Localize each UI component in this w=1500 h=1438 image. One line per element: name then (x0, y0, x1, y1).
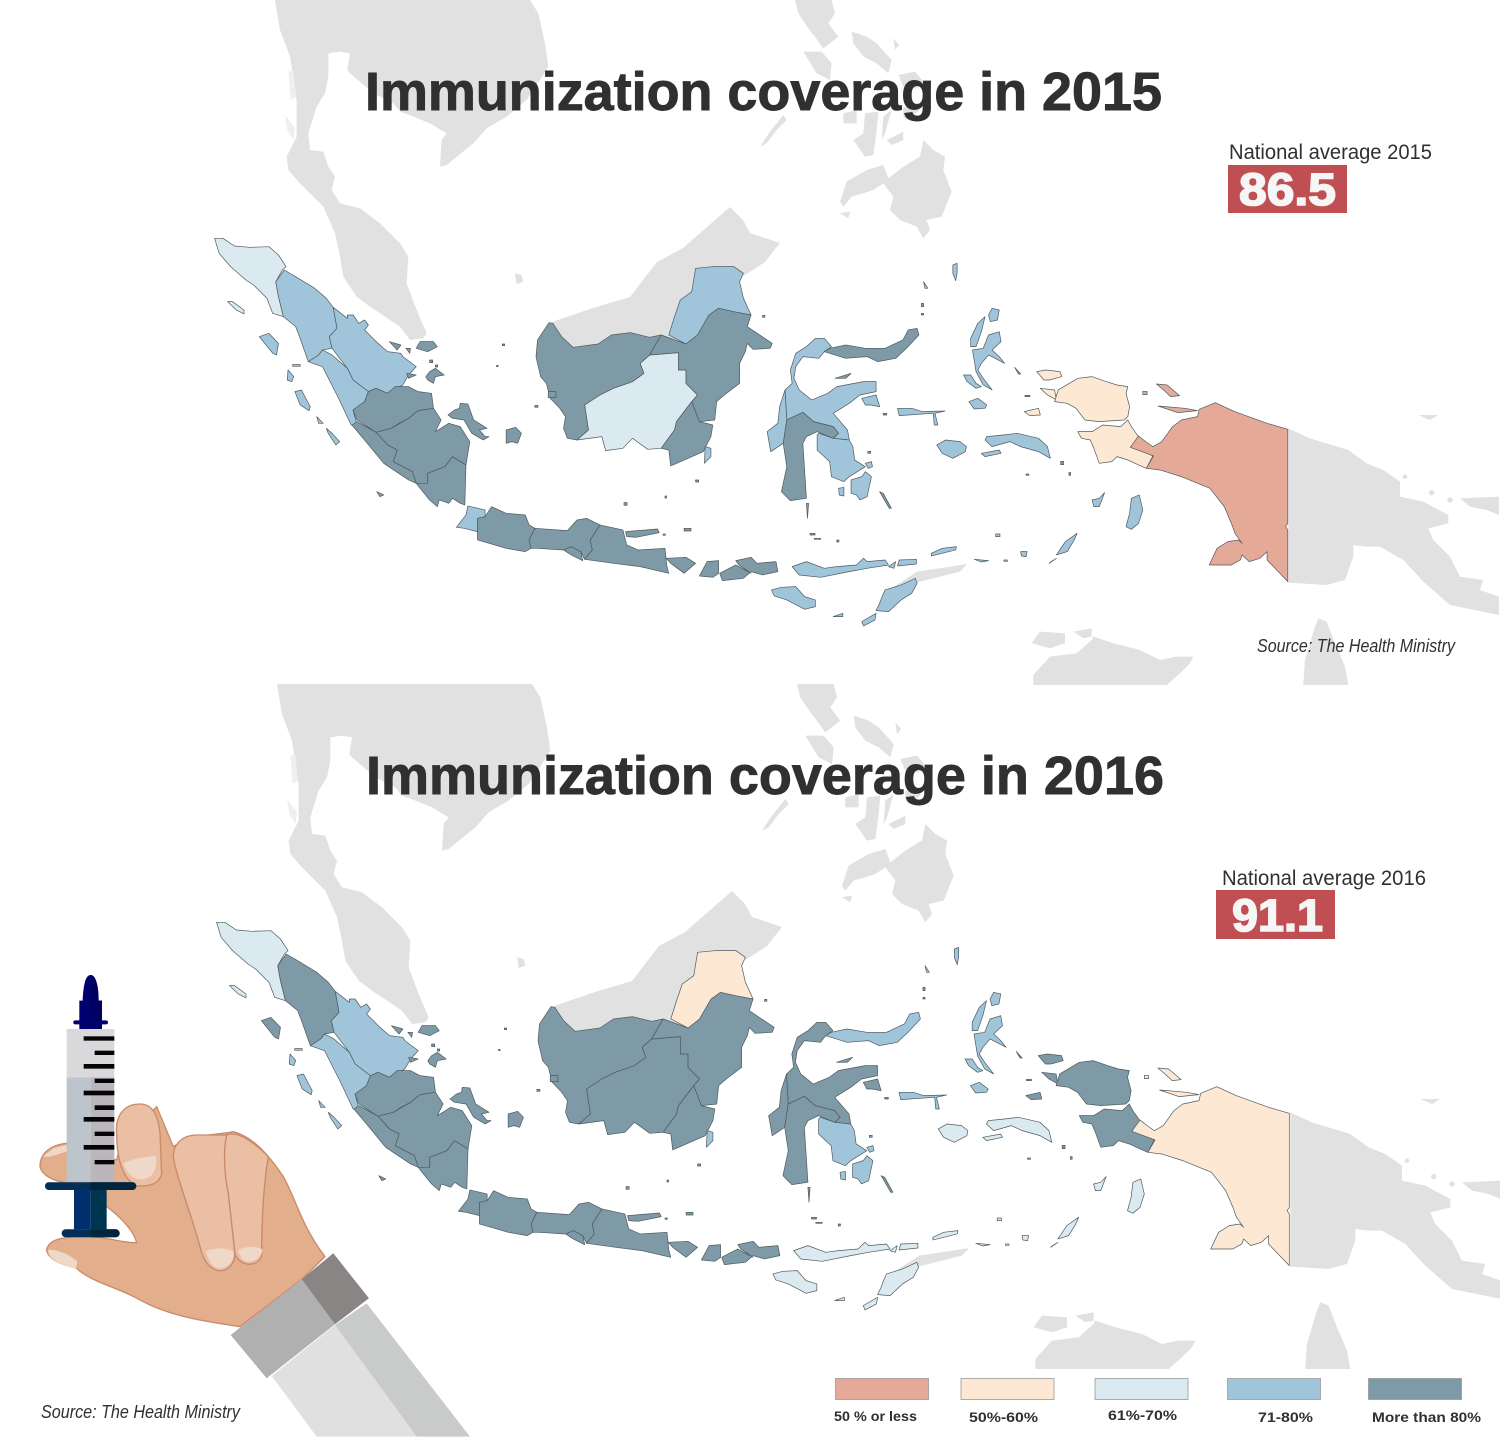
legend item: More than 80%: More than 80% (1372, 1409, 1482, 1425)
legend (834, 1378, 1482, 1425)
grey neighbouring countries 2016 (277, 684, 1500, 1369)
legend item: 71-80%: 71-80% (1258, 1409, 1314, 1425)
source 2015: Source: The Health Ministry (1257, 636, 1456, 656)
source 2016: Source: The Health Ministry (41, 1402, 241, 1422)
legend item: 50%-60%: 50%-60% (969, 1409, 1039, 1425)
background map and panel: 2016 (217, 684, 1500, 1369)
legend item: 61%-70%: 61%-70% (1108, 1407, 1178, 1423)
legend item: More than 80% (1368, 1378, 1482, 1425)
sleeve (272, 1303, 470, 1437)
choropleth map 2015: Sumatra, Java, Kalimantan (215, 238, 778, 581)
legend item: 61%-70% (1095, 1378, 1188, 1423)
choropleth map 2016: Sulawesi, Maluku, Nusa Tenggara, Papua (769, 947, 1289, 1310)
choropleth map 2016: Sumatra, Java, Kalimantan (217, 922, 780, 1265)
syringe (45, 975, 136, 1237)
legend item: 50%-60% (961, 1378, 1054, 1425)
title 2016: Immunization coverage in 2016 (366, 746, 1164, 806)
fingernail: lower thumb (48, 1250, 77, 1269)
legend item: 50 % or less: 50 % or less (834, 1408, 917, 1424)
legend item: 50 % or less (834, 1378, 928, 1424)
national average label 2015: National average 2015 (1229, 141, 1432, 164)
shirt cuff (231, 1253, 369, 1378)
legend item: 71-80% (1228, 1378, 1320, 1425)
national average value 2015: 86.5 (1239, 164, 1336, 215)
ring finger (225, 1134, 268, 1264)
background map and panel: 2015 (215, 0, 1499, 685)
index finger (116, 1104, 162, 1186)
national average value 2016: 91.1 (1232, 890, 1323, 941)
middle finger (173, 1135, 235, 1271)
choropleth map 2015: Sulawesi, Maluku, Nusa Tenggara, Papua (767, 263, 1288, 626)
title 2015: Immunization coverage in 2015 (365, 62, 1162, 122)
illustration: hand holding syringe (40, 975, 470, 1437)
fingernail: upper finger (43, 1145, 67, 1157)
grey neighbouring countries 2015 (275, 0, 1499, 685)
national average label 2016: National average 2016 (1222, 867, 1426, 890)
hand palm (40, 1107, 325, 1327)
